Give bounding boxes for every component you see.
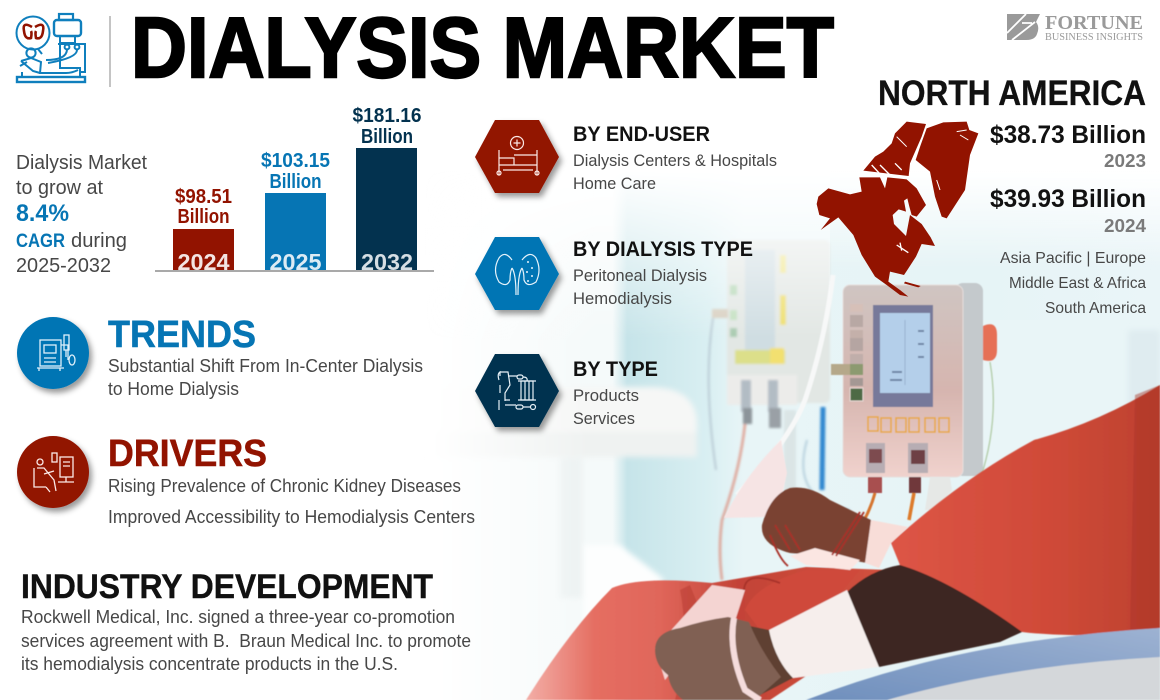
2023 value: 2023 — [1104, 151, 1146, 171]
title: DIALYSIS MARKET — [131, 1, 834, 96]
header icon: dialysis patient with kidney — [16, 14, 85, 82]
white IV tube — [737, 275, 833, 495]
bar: 2025 — [261, 150, 330, 275]
trends text: to Home Dialysis — [108, 379, 239, 399]
dialysis type items — [573, 267, 707, 308]
industry development text: services agreement with B. Braun Medical Inc. to promote — [21, 631, 471, 651]
other regions list — [1000, 250, 1146, 317]
bar: 2024: Billion — [178, 206, 230, 228]
chair arm — [806, 628, 1160, 700]
icon: drivers circle with patient in chair — [17, 436, 89, 508]
bar: 2024: 2024 — [178, 249, 230, 275]
bar: 2024 — [173, 186, 234, 275]
end-user heading: BY END-USER — [573, 123, 710, 146]
table and pole — [430, 387, 697, 620]
trends text: Substantial Shift From In-Center Dialysis — [108, 356, 423, 376]
map: North America — [817, 122, 978, 297]
2024 value: $39.93 Billion — [990, 185, 1146, 213]
2024 value — [990, 185, 1146, 236]
drivers text — [108, 476, 475, 527]
bar: 2032: $181.16 — [352, 105, 422, 127]
blanket — [526, 567, 910, 700]
industry development heading: INDUSTRY DEVELOPMENT — [21, 568, 433, 606]
growth summary text: during — [71, 230, 127, 252]
type heading: BY TYPE — [573, 358, 658, 381]
dialysis type items: Hemodialysis — [573, 290, 672, 308]
icon: end-user hexagon with hospital bed — [475, 120, 559, 193]
logo: Fortune Business Insights: FORTUNE — [1045, 12, 1143, 34]
bandage — [769, 590, 879, 678]
upper hand — [762, 488, 871, 563]
dialysis type items: Peritoneal Dialysis — [573, 267, 707, 285]
upper bag — [724, 440, 787, 518]
background photo: dialysis patient and machines — [425, 170, 1160, 700]
dialysis type heading: BY DIALYSIS TYPE — [573, 238, 753, 261]
drivers heading: DRIVERS — [108, 433, 267, 475]
other regions list: South America — [1045, 300, 1146, 317]
bar: 2024: $98.51 — [175, 186, 232, 208]
growth summary text: Dialysis Market — [16, 152, 147, 174]
type items: Products — [573, 387, 639, 405]
bar: 2032: Billion — [361, 126, 413, 148]
end-user items: Home Care — [573, 175, 656, 193]
left blurred machine — [709, 240, 850, 580]
growth summary text: 2025-2032 — [16, 255, 111, 277]
bar: 2032: 2032 — [361, 249, 413, 275]
bar: 2025: $103.15 — [261, 150, 330, 172]
2024 value: 2024 — [1104, 216, 1146, 236]
logo: Fortune Business Insights: BUSINESS INSIGHTS — [1045, 32, 1143, 43]
2023 value: $38.73 Billion — [990, 121, 1146, 149]
lower hand — [655, 617, 781, 700]
icon: trends circle with dialysis machine — [17, 317, 89, 389]
growth summary text: 8.4% — [16, 200, 69, 227]
bar: 2025: 2025 — [270, 249, 322, 275]
drivers text: Rising Prevalence of Chronic Kidney Diseases — [108, 476, 461, 496]
growth summary text: to grow at — [16, 177, 103, 199]
type items — [573, 387, 639, 428]
logo: Fortune Business Insights — [1007, 12, 1143, 43]
2023 value — [990, 121, 1146, 171]
growth summary text — [16, 152, 147, 277]
patient group — [526, 385, 1160, 700]
front machine — [830, 283, 997, 565]
header divider — [109, 16, 111, 87]
red gown sleeve — [891, 385, 1160, 635]
industry development text — [21, 607, 471, 674]
icon: type hexagon with hand and dialyzer — [475, 354, 559, 427]
icon: dialysis type hexagon with kidneys — [475, 237, 559, 310]
white fades over photo — [425, 170, 595, 700]
drivers text: Improved Accessibility to Hemodialysis Centers — [108, 507, 475, 527]
bar: 2032 — [352, 105, 422, 275]
growth summary text: CAGR — [16, 231, 65, 252]
lower bag — [655, 585, 745, 680]
bar: 2025: Billion — [270, 171, 322, 193]
cuff and tubes — [865, 520, 908, 568]
arm — [847, 565, 1022, 667]
industry development text: Rockwell Medical, Inc. signed a three-year co-promotion — [21, 607, 455, 627]
end-user items — [573, 152, 777, 193]
industry development text: its hemodialysis concentrate products in the U.S. — [21, 654, 398, 674]
type items: Services — [573, 410, 635, 428]
other regions list: Asia Pacific | Europe — [1000, 250, 1146, 267]
trends heading: TRENDS — [108, 314, 256, 356]
other regions list: Middle East & Africa — [1009, 275, 1146, 292]
bar chart — [155, 105, 434, 275]
trends text — [108, 356, 423, 399]
end-user items: Dialysis Centers & Hospitals — [573, 152, 777, 170]
